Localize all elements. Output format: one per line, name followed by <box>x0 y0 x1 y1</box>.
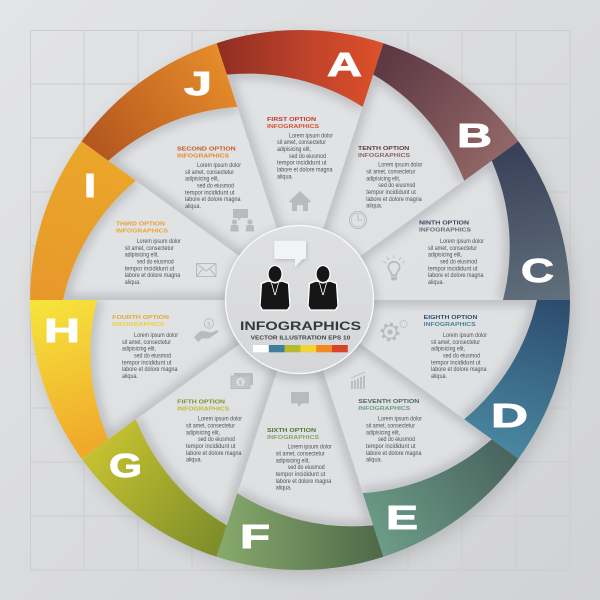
body: ninth option: aliqua. <box>428 279 444 286</box>
body: seventh option: aliqua. <box>366 457 382 464</box>
body: tenth option: tempor incididunt ut <box>366 189 416 196</box>
body: fifth option: labore et dolore magna <box>186 450 242 457</box>
heading: sixth option: SIXTH OPTION <box>267 428 316 434</box>
body: tenth option <box>366 162 422 210</box>
body: sixth option: aliqua. <box>276 485 292 492</box>
heading: seventh option: SEVENTH OPTION <box>358 399 419 405</box>
body: fourth option: tempor incididunt ut <box>122 359 172 366</box>
body: fifth option: Lorem ipsum dolor <box>198 416 242 423</box>
band B <box>373 43 518 181</box>
body: first option: Lorem ipsum dolor <box>289 132 333 139</box>
body: ninth option: tempor incididunt ut <box>428 265 478 272</box>
text block: ninth option <box>419 221 484 286</box>
body: tenth option: aliqua. <box>366 203 383 210</box>
letter A: A <box>327 46 362 83</box>
body: eighth option: tempor incididunt ut <box>431 359 481 366</box>
letter I: I <box>84 167 96 204</box>
body: tenth option: adipisicing elit, <box>366 175 401 182</box>
heading: ninth option: NINTH OPTION <box>419 221 469 227</box>
letter D: D <box>491 397 528 434</box>
body: fourth option: Lorem ipsum dolor <box>134 332 178 339</box>
band J <box>82 43 237 161</box>
body: eighth option: sit amet, consectetur <box>431 339 480 346</box>
body: sixth option <box>276 444 332 492</box>
body: fifth option <box>186 416 242 464</box>
body: tenth option: Lorem ipsum dolor <box>378 162 422 169</box>
text block: ninth option: INFOGRAPHICS <box>419 228 471 234</box>
band A <box>217 30 383 107</box>
body: ninth option: Lorem ipsum dolor <box>440 238 484 245</box>
band D <box>464 300 570 459</box>
speech bubble <box>274 241 307 268</box>
text block: tenth option: INFOGRAPHICS <box>358 153 410 159</box>
heading: eighth option: EIGHTH OPTION <box>424 315 477 321</box>
icon: speech bubble <box>291 392 309 407</box>
icon: clock <box>350 212 366 228</box>
body: second option: labore et dolore magna <box>185 196 241 203</box>
body: seventh option: sit amet, consectetur <box>366 423 415 430</box>
body: third option: labore et dolore magna <box>125 272 181 279</box>
body: first option: sed do eiusmod <box>289 153 326 160</box>
body: eighth option: aliqua. <box>431 373 447 380</box>
text block: seventh option: INFOGRAPHICS <box>358 406 411 412</box>
band G <box>82 419 227 557</box>
body: fourth option: sed do eiusmod <box>134 352 171 360</box>
body: seventh option <box>366 416 422 464</box>
letter B: B <box>457 117 492 154</box>
body: eighth option: sed do eiusmod <box>443 352 480 360</box>
text block: fourth option <box>112 315 178 380</box>
heading: fifth option: FIFTH OPTION <box>177 400 225 406</box>
body: sixth option: labore et dolore magna <box>276 478 332 485</box>
body: fifth option: tempor incididunt ut <box>186 443 236 450</box>
center title: INFOGRAPHICS <box>240 319 361 333</box>
text block: third option: INFOGRAPHICS <box>116 228 168 234</box>
person right <box>308 266 338 310</box>
body: sixth option: adipisicing elit, <box>276 457 310 464</box>
band C <box>492 141 570 300</box>
icon: banknotes: $ <box>239 380 243 386</box>
body: ninth option <box>428 238 484 286</box>
body: third option <box>125 238 181 286</box>
body: third option: sit amet, consectetur <box>125 245 174 252</box>
body: fourth option: labore et dolore magna <box>122 366 178 373</box>
body: eighth option <box>431 332 487 380</box>
body: fourth option: sit amet, consectetur <box>122 339 171 346</box>
body: seventh option: tempor incididunt ut <box>366 443 416 450</box>
body: eighth option: Lorem ipsum dolor <box>443 332 487 339</box>
body: first option: sit amet, consectetur <box>277 139 326 146</box>
body: third option: sed do eiusmod <box>137 258 174 266</box>
text block: tenth option <box>358 146 422 210</box>
body: fifth option: sit amet, consectetur <box>186 423 235 430</box>
body: seventh option: Lorem ipsum dolor <box>378 416 422 423</box>
icon: light bulb <box>383 255 405 280</box>
heading: second option: SECOND OPTION <box>177 146 236 152</box>
body: first option: aliqua. <box>277 173 293 180</box>
letter H: H <box>44 312 80 349</box>
body: ninth option: labore et dolore magna <box>428 272 484 279</box>
body: first option <box>277 132 333 180</box>
text block: first option: INFOGRAPHICS <box>267 124 319 130</box>
body: ninth option: sit amet, consectetur <box>428 245 477 252</box>
body: tenth option: sed do eiusmod <box>378 182 416 189</box>
body: ninth option: adipisicing elit, <box>428 252 462 259</box>
icon: hand with coin: $ <box>207 322 210 328</box>
body: seventh option: adipisicing elit, <box>366 429 400 436</box>
body: second option: sed do eiusmod <box>197 182 234 190</box>
body: third option: adipisicing elit, <box>125 252 159 259</box>
band H <box>30 300 108 459</box>
band F <box>217 493 383 570</box>
center circle shadow <box>224 227 376 379</box>
body: tenth option: sit amet, consectetur <box>366 169 415 176</box>
letter E: E <box>386 499 418 536</box>
heading: third option: THIRD OPTION <box>116 221 165 227</box>
text block: fifth option <box>177 400 242 464</box>
text block: second option <box>177 146 241 210</box>
body: second option: aliqua. <box>185 203 201 210</box>
body: second option <box>185 162 241 210</box>
body: third option: aliqua. <box>125 279 141 286</box>
text block: sixth option: INFOGRAPHICS <box>267 435 319 441</box>
body: fourth option: aliqua. <box>122 373 138 380</box>
body: second option: Lorem ipsum dolor <box>197 162 241 169</box>
icon: bar chart <box>351 372 365 389</box>
text block: eighth option: INFOGRAPHICS <box>424 322 476 328</box>
icon: envelope <box>196 264 216 276</box>
text block: second option: INFOGRAPHICS <box>177 153 229 159</box>
letter C: C <box>521 252 554 289</box>
center circle <box>226 226 374 374</box>
body: second option: tempor incididunt ut <box>185 189 235 196</box>
heading: fourth option: FOURTH OPTION <box>112 315 169 321</box>
center subtitle: VECTOR ILLUSTRATION EPS 10 <box>251 335 350 341</box>
wheel drop shadow <box>36 38 572 574</box>
body: seventh option: labore et dolore magna <box>366 450 422 457</box>
letter F: F <box>240 518 270 555</box>
body: first option: adipisicing elit, <box>277 146 311 153</box>
letter G: G <box>109 447 142 484</box>
band I <box>30 141 136 300</box>
body: eighth option: adipisicing elit, <box>431 346 465 353</box>
body: first option: labore et dolore magna <box>277 167 333 174</box>
text block: first option <box>267 117 333 180</box>
text block: third option <box>116 221 181 286</box>
body: fifth option: aliqua. <box>186 457 202 464</box>
body: tenth option: labore et dolore magna <box>366 196 422 203</box>
icon: hand with coin <box>194 319 218 342</box>
text block: sixth option <box>267 428 332 492</box>
icon: gears <box>382 320 407 340</box>
heading: first option: FIRST OPTION <box>267 117 316 123</box>
body: sixth option: sit amet, consectetur <box>276 451 325 458</box>
person left <box>260 266 290 310</box>
body: sixth option: Lorem ipsum dolor <box>288 444 332 451</box>
body: sixth option: tempor incididunt ut <box>276 471 325 478</box>
body: fifth option: adipisicing elit, <box>186 429 220 436</box>
body: third option: tempor incididunt ut <box>125 265 174 272</box>
panel backgrounds <box>63 74 570 570</box>
body: third option: Lorem ipsum dolor <box>137 238 181 245</box>
body: sixth option: sed do eiusmod <box>288 464 325 471</box>
body: fourth option: adipisicing elit, <box>122 346 156 353</box>
body: second option: adipisicing elit, <box>185 176 219 183</box>
text block: fourth option: INFOGRAPHICS <box>112 322 165 328</box>
text block: fifth option: INFOGRAPHICS <box>177 407 230 413</box>
icon: banknotes <box>231 373 253 388</box>
body: fourth option <box>122 332 178 380</box>
body: eighth option: labore et dolore magna <box>431 366 487 373</box>
heading: tenth option: TENTH OPTION <box>358 146 409 152</box>
icon: house <box>289 191 311 211</box>
body: fifth option: sed do eiusmod <box>198 436 235 443</box>
body: ninth option: sed do eiusmod <box>440 258 477 266</box>
text block: eighth option <box>424 315 487 380</box>
body: second option: sit amet, consectetur <box>185 169 234 176</box>
text block: seventh option <box>358 399 422 464</box>
colour bar <box>253 345 348 352</box>
letter J: J <box>184 65 212 102</box>
body: seventh option: sed do eiusmod <box>378 436 415 443</box>
body: first option: tempor incididunt ut <box>277 160 327 167</box>
icon: two people talking <box>230 209 254 232</box>
band E <box>363 439 518 557</box>
